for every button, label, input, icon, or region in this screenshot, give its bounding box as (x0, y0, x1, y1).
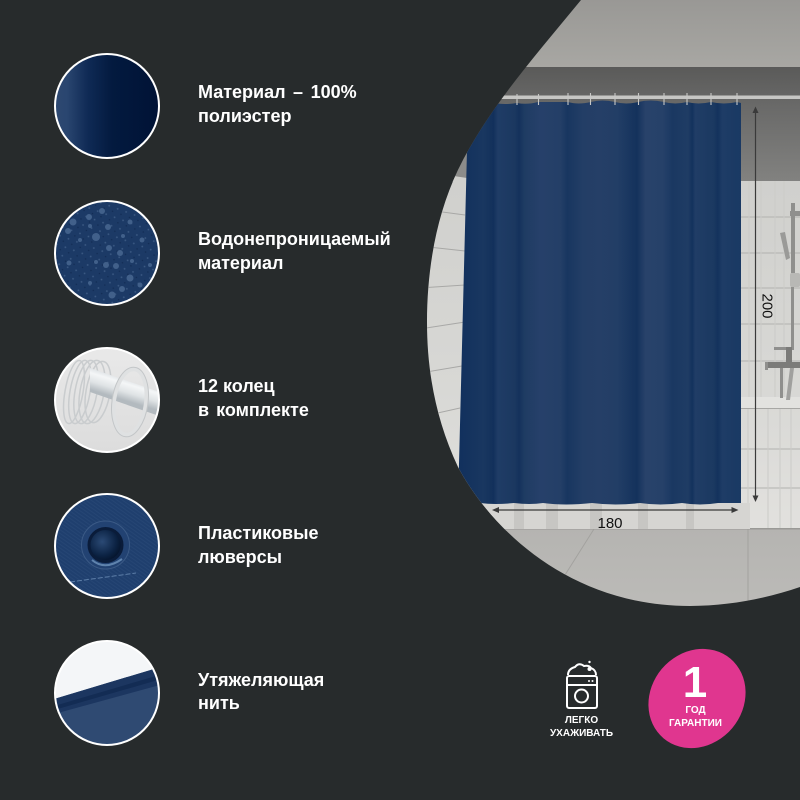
fabric swatch (54, 53, 160, 159)
grommet swatch (54, 493, 160, 599)
feature: material: полиэстер (198, 106, 291, 126)
skirting below curtain (470, 503, 750, 529)
height label 200: 200 (758, 293, 776, 319)
rings text: 12 колец (198, 376, 275, 396)
warranty text: ГОД (685, 705, 706, 716)
feature: material (54, 53, 357, 159)
swatch ring (55, 348, 159, 452)
curtain rod (496, 96, 800, 99)
feature: rings: в комплекте (198, 400, 309, 420)
warranty number: 1 (683, 658, 707, 707)
width label 180: 180 (597, 515, 623, 532)
shower fixture (765, 203, 800, 400)
pink blob (628, 629, 766, 768)
width dimension arrow (492, 507, 738, 513)
rings and rod swatch (56, 349, 158, 451)
material text: Материал – 100% (198, 82, 357, 102)
bathroom photo with curtain (420, 0, 800, 609)
hem swatch (56, 642, 158, 744)
waterproof text: Водонепроницаемый (198, 229, 391, 249)
upper wall (420, 67, 800, 182)
easy care text: ЛЕГКО (565, 715, 598, 726)
feature: waterproof (54, 200, 391, 306)
curtain rings (494, 93, 737, 105)
feature: weighted thread (54, 640, 324, 750)
swatch ring (55, 494, 159, 598)
feature: rings (54, 347, 309, 453)
warranty badge (628, 629, 766, 768)
curtain (458, 100, 741, 504)
swatch ring (55, 641, 159, 745)
water drops swatch (54, 200, 160, 306)
swatch ring (55, 201, 159, 305)
swatch ring (55, 54, 159, 158)
feature: grommets: люверсы (198, 547, 282, 567)
height dimension arrow (752, 106, 758, 502)
easy care badge: УХАЖИВАТЬ (550, 728, 613, 739)
feature: waterproof: материал (198, 253, 283, 273)
feature: grommets (54, 493, 318, 599)
thread text: Утяжеляющая (198, 670, 324, 690)
bath tub (741, 397, 800, 409)
ceiling (526, 0, 800, 67)
easy care badge (550, 661, 613, 739)
feature: weighted thread: нить (198, 693, 240, 713)
tiled wall (420, 150, 800, 531)
grommet text: Пластиковые (198, 523, 318, 543)
icon: washing machine (567, 661, 597, 708)
warranty badge: ГАРАНТИИ (669, 718, 722, 729)
floor (504, 528, 800, 606)
